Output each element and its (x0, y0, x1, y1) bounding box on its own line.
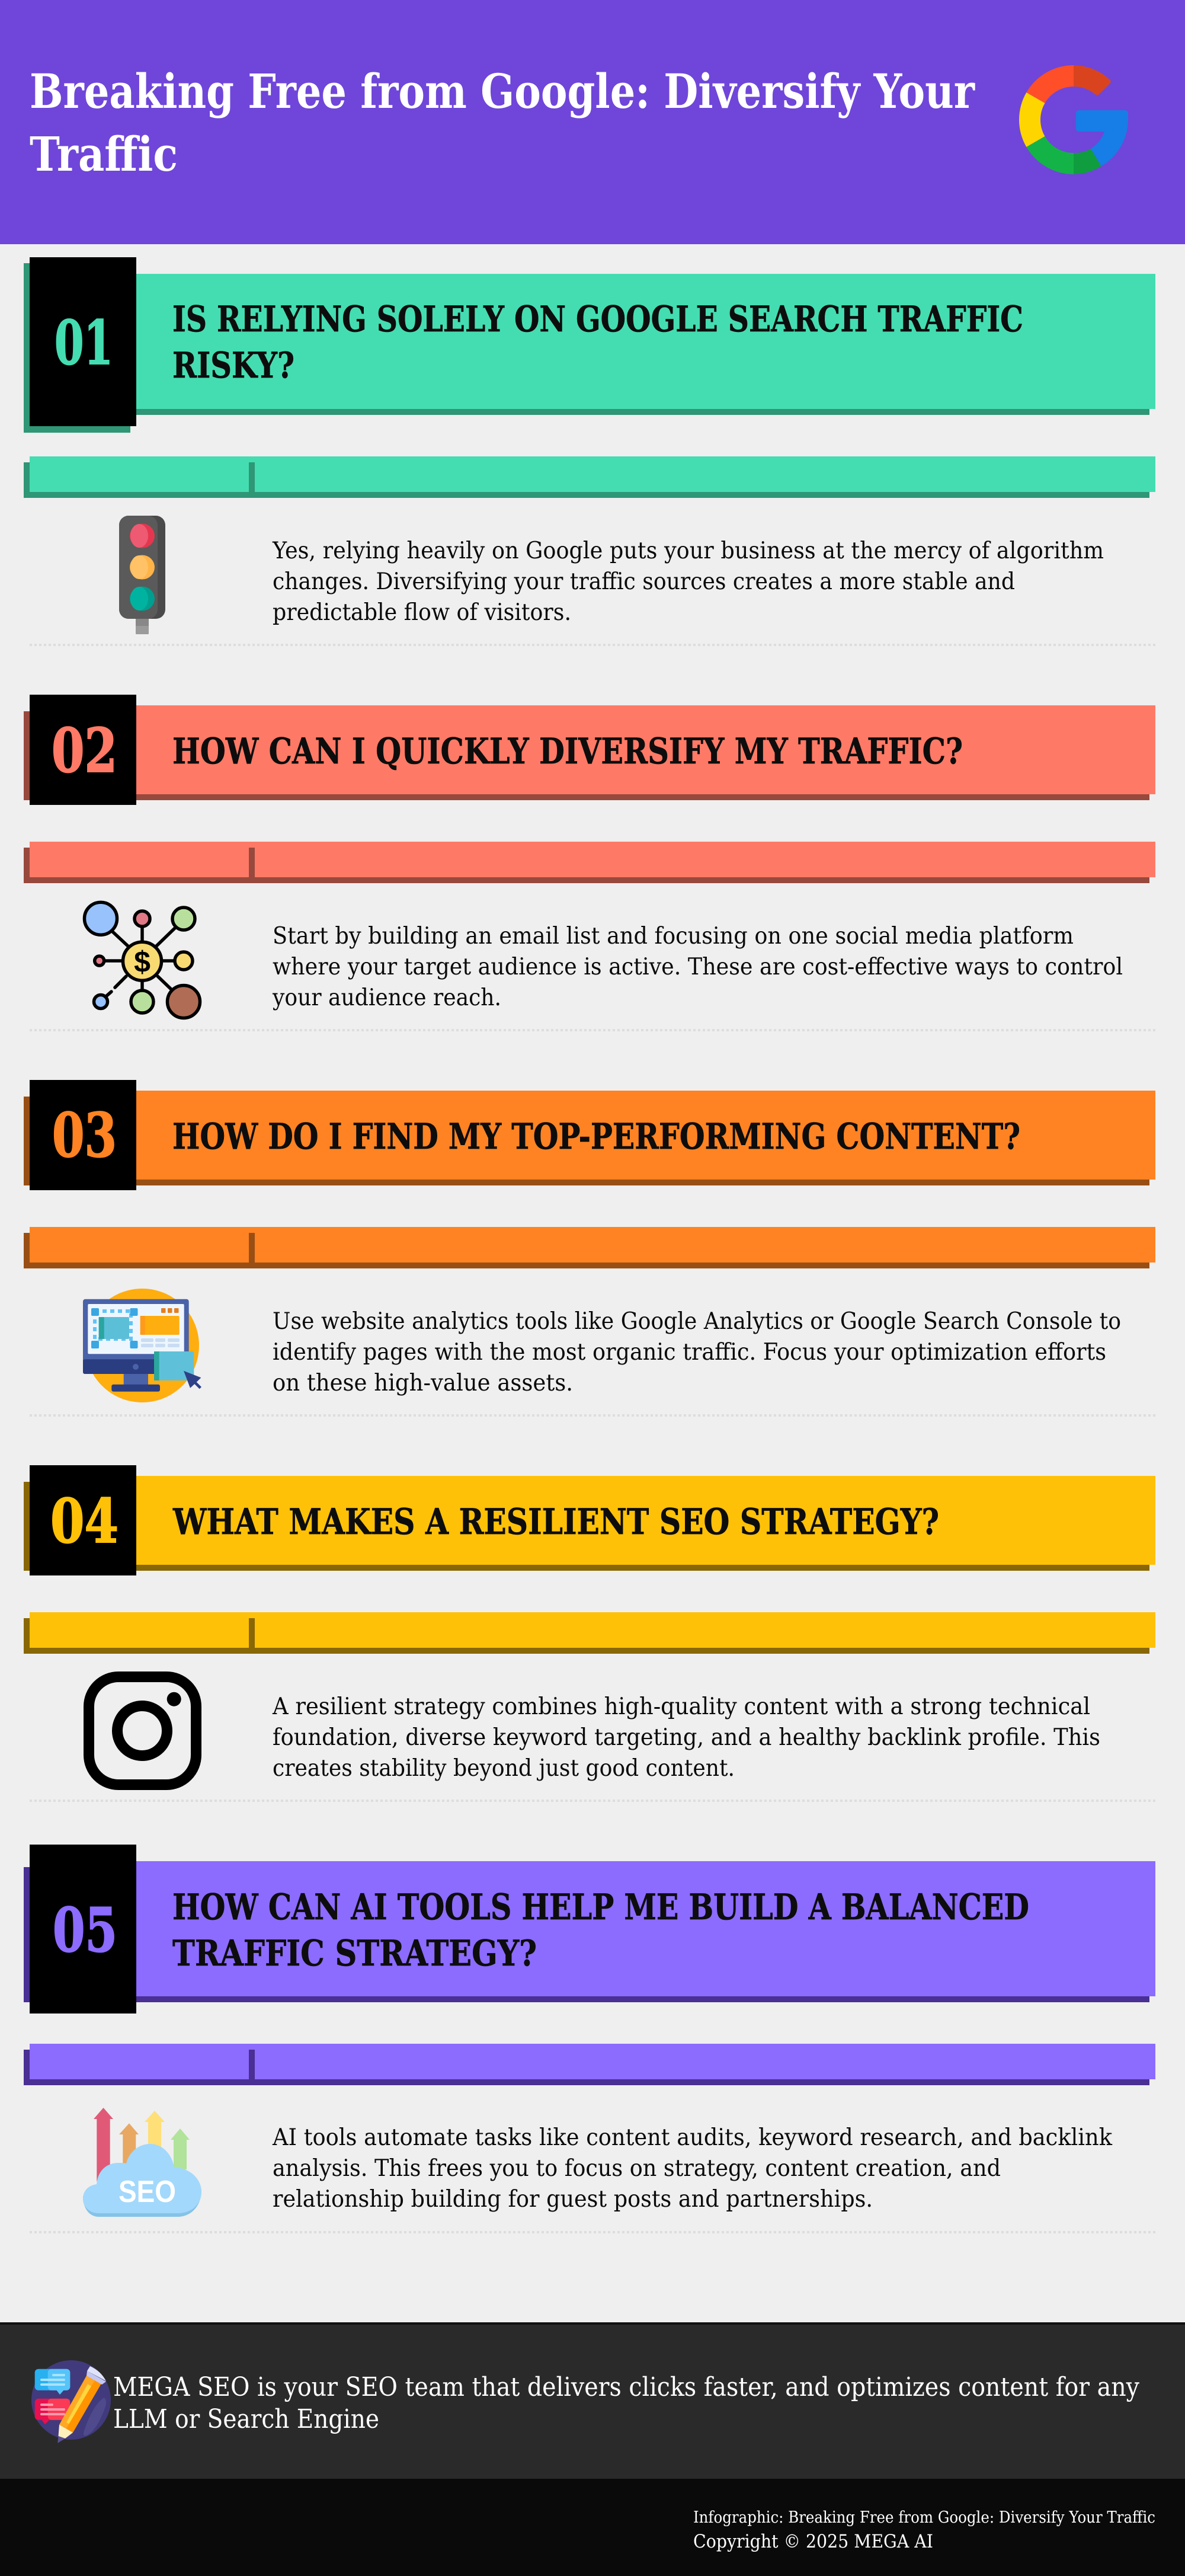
answer text: Use website analytics tools like Google Analytics or Google Search Console to (273, 1308, 1121, 1335)
answer text: A resilient strategy combines high-quality content with a strong technical (272, 1693, 1090, 1720)
icon: traffic light (119, 516, 165, 634)
heading: TRAFFIC STRATEGY? (172, 1933, 537, 1974)
promo text (113, 2372, 1139, 2434)
answer bar (24, 2044, 1155, 2085)
heading bar (136, 1091, 1155, 1180)
answer text: where your target audience is active. These are cost-effective ways to control (273, 954, 1123, 980)
icon: google G (1019, 65, 1128, 174)
icon: pencil and chat bubbles (31, 2360, 111, 2443)
number box: 04 (50, 1486, 118, 1557)
copyright text: Copyright © 2025 MEGA AI (693, 2531, 933, 2552)
answer text: AI tools automate tasks like content audits, keyword research, and backlink (272, 2124, 1112, 2151)
icon: money network: $ (134, 945, 150, 979)
heading bar (136, 274, 1155, 409)
title (30, 63, 975, 182)
heading bar shadow (24, 280, 1149, 415)
section 5 (24, 1845, 1155, 2232)
heading: HOW DO I FIND MY TOP-PERFORMING CONTENT? (172, 1116, 1020, 1158)
answer text: on these high-value assets. (273, 1370, 573, 1396)
promo footer panel (0, 2322, 1185, 2479)
answer text (272, 1693, 1100, 1782)
answer text: foundation, diverse keyword targeting, and a healthy backlink profile. This (273, 1724, 1100, 1751)
answer text: your audience reach. (272, 985, 501, 1011)
number box shadow (24, 263, 130, 433)
number box (30, 695, 136, 805)
section 1 (24, 257, 1155, 645)
copyright footer panel (0, 2479, 1185, 2576)
header panel (0, 0, 1185, 244)
icon: money network (84, 902, 200, 1018)
icon: instagram (89, 1677, 196, 1785)
answer text: relationship building for guest posts and partnerships. (273, 2186, 873, 2213)
number box: 01 (55, 308, 113, 379)
heading bar (136, 1861, 1155, 1996)
icon: SEO cloud with arrows (83, 2108, 201, 2217)
answer text: changes. Diversifying your traffic sources creates a more stable and (273, 568, 1015, 595)
heading bar shadow (24, 1097, 1149, 1185)
section 3 (24, 1080, 1155, 1415)
heading bar shadow (24, 711, 1149, 800)
answer text: identify pages with the most organic traffic. Focus your optimization efforts (273, 1339, 1106, 1366)
section 4 (24, 1465, 1155, 1801)
promo text: LLM or Search Engine (113, 2404, 379, 2434)
answer text: creates stability beyond just good content. (273, 1755, 735, 1782)
answer text (272, 923, 1123, 1011)
heading bar (136, 705, 1155, 794)
section 2 (24, 695, 1155, 1030)
number box (30, 257, 136, 426)
icon: SEO cloud with arrows: SEO (118, 2175, 176, 2209)
number box: 03 (52, 1100, 117, 1171)
heading bar (136, 1476, 1155, 1565)
icon: monitor with cursor (83, 1289, 201, 1402)
heading bar shadow (24, 1482, 1149, 1571)
number box (30, 1080, 136, 1190)
title: Breaking Free from Google: Diversify Your (30, 63, 975, 119)
title: Traffic (30, 126, 178, 182)
number box (30, 1845, 136, 2014)
answer text: Start by building an email list and focusing on one social media platform (273, 923, 1074, 950)
answer bar (24, 1612, 1155, 1654)
heading: RISKY? (172, 345, 294, 386)
number box: 05 (53, 1895, 117, 1966)
answer text: Yes, relying heavily on Google puts your business at the mercy of algorithm (272, 538, 1104, 564)
heading: HOW CAN I QUICKLY DIVERSIFY MY TRAFFIC? (172, 731, 963, 772)
heading bar shadow (24, 1867, 1149, 2002)
answer bar (24, 842, 1155, 883)
answer text (273, 1308, 1121, 1396)
heading (172, 299, 1023, 386)
number box (30, 1465, 136, 1575)
copyright text (693, 2508, 1155, 2552)
heading: WHAT MAKES A RESILIENT SEO STRATEGY? (172, 1501, 939, 1543)
answer bar (24, 456, 1155, 498)
heading (172, 1887, 1029, 1974)
answer text: analysis. This frees you to focus on strategy, content creation, and (273, 2155, 1001, 2182)
answer text (272, 538, 1104, 626)
answer text (272, 2124, 1112, 2213)
number box: 02 (52, 715, 117, 787)
answer text: predictable flow of visitors. (273, 599, 571, 626)
answer bar (24, 1227, 1155, 1268)
